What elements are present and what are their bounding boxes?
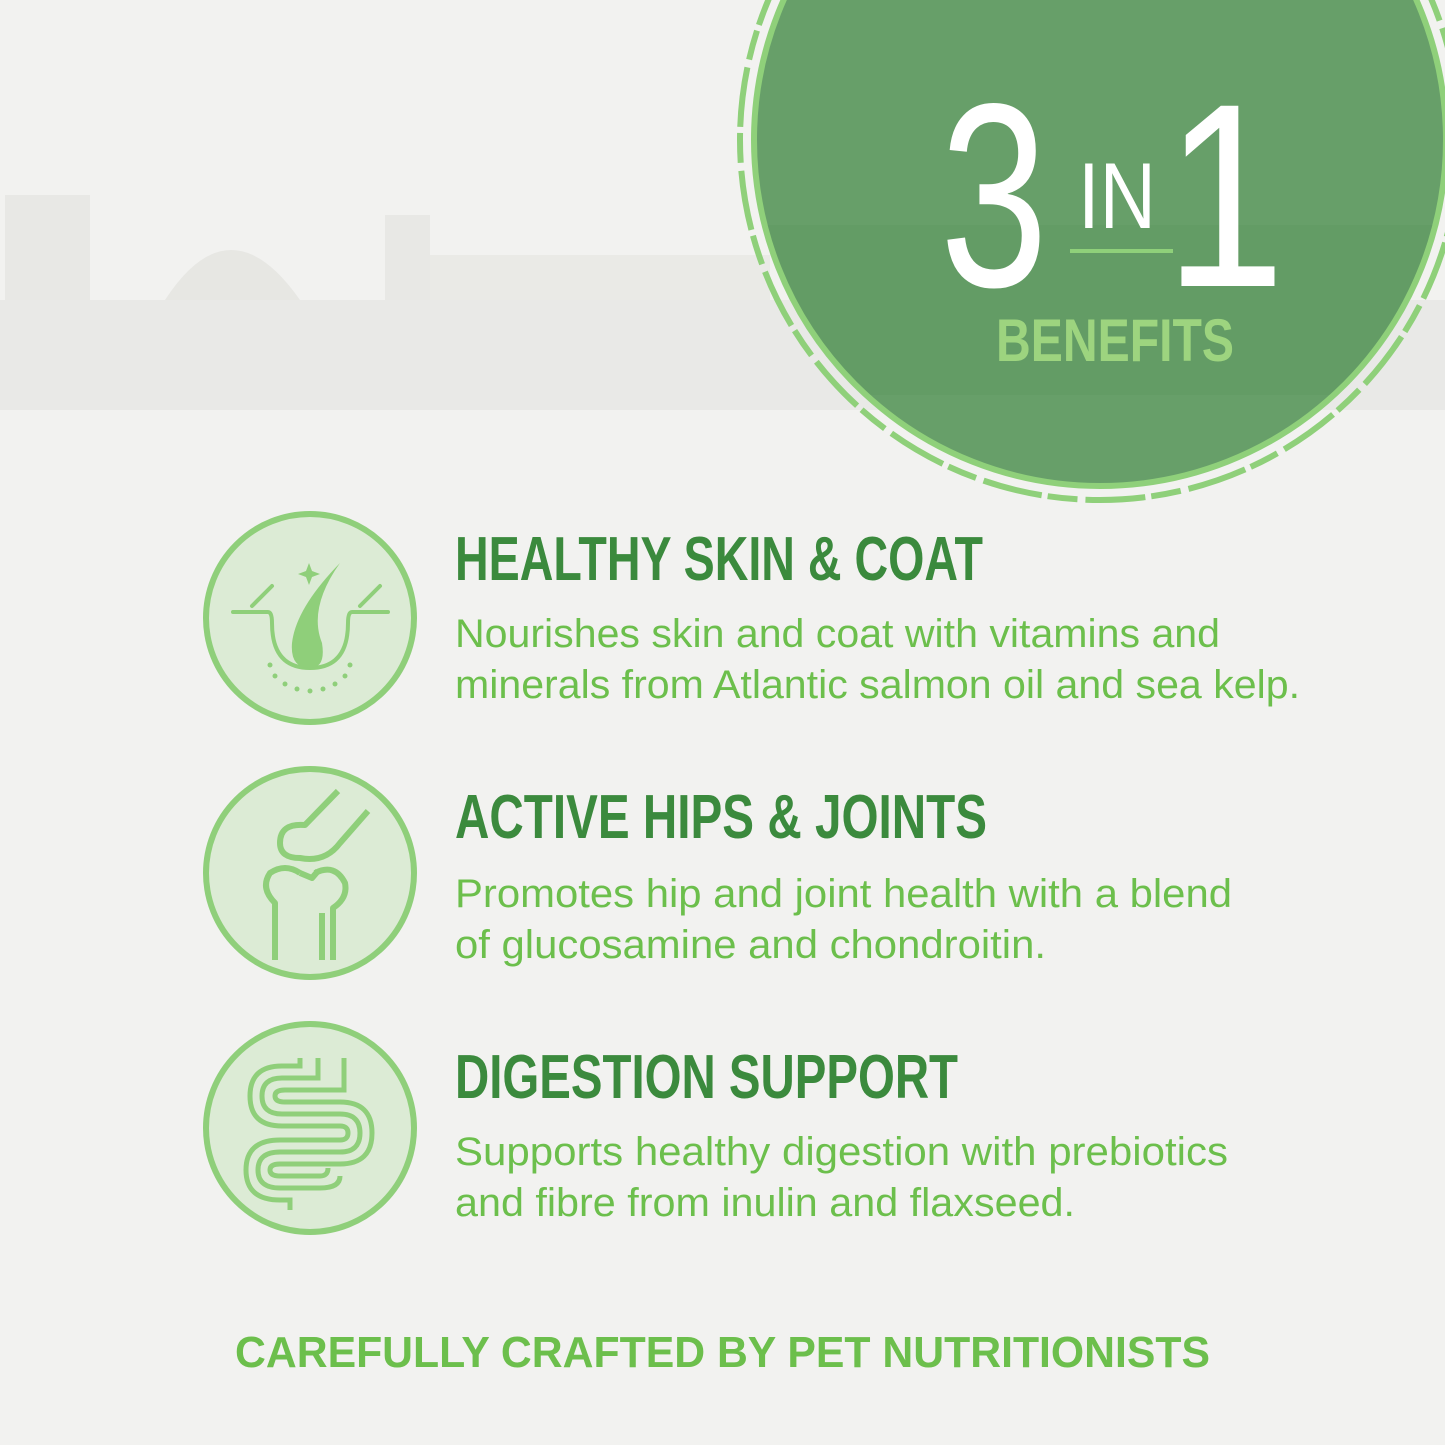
text: skin & coat description (455, 612, 1300, 707)
badge: 3 in 1 benefits: BENEFITS (996, 307, 1234, 374)
text: hips & joints description (455, 872, 1232, 967)
text: skin & coat description: Nourishes skin and coat with vitamins and (455, 612, 1220, 656)
badge: 3 in 1 benefits: 1 (1165, 49, 1285, 342)
heading: digestion support: DIGESTION SUPPORT (455, 1043, 958, 1112)
icon: joint bone (203, 766, 417, 980)
text: hips & joints description: Promotes hip and joint health with a blend (455, 872, 1232, 916)
badge: 3 in 1 benefits (737, 0, 1445, 503)
heading: healthy skin & coat: HEALTHY SKIN & COAT (455, 525, 983, 594)
icon: hair follicle (203, 511, 417, 725)
badge: 3 in 1 benefits: 3 (940, 49, 1048, 342)
text: skin & coat description: minerals from Atlantic salmon oil and sea kelp. (455, 663, 1300, 707)
badge: 3 in 1 benefits: IN (1078, 143, 1156, 248)
icon: intestine (203, 1021, 417, 1235)
text: digestion description: Supports healthy digestion with prebiotics (455, 1130, 1228, 1174)
text: hips & joints description: of glucosamine and chondroitin. (455, 923, 1046, 967)
text: digestion description: and fibre from inulin and flaxseed. (455, 1181, 1075, 1225)
footer tagline: CAREFULLY CRAFTED BY PET NUTRITIONISTS (235, 1328, 1210, 1377)
text: digestion description (455, 1130, 1228, 1225)
heading: active hips & joints: ACTIVE HIPS & JOINTS (455, 783, 987, 852)
